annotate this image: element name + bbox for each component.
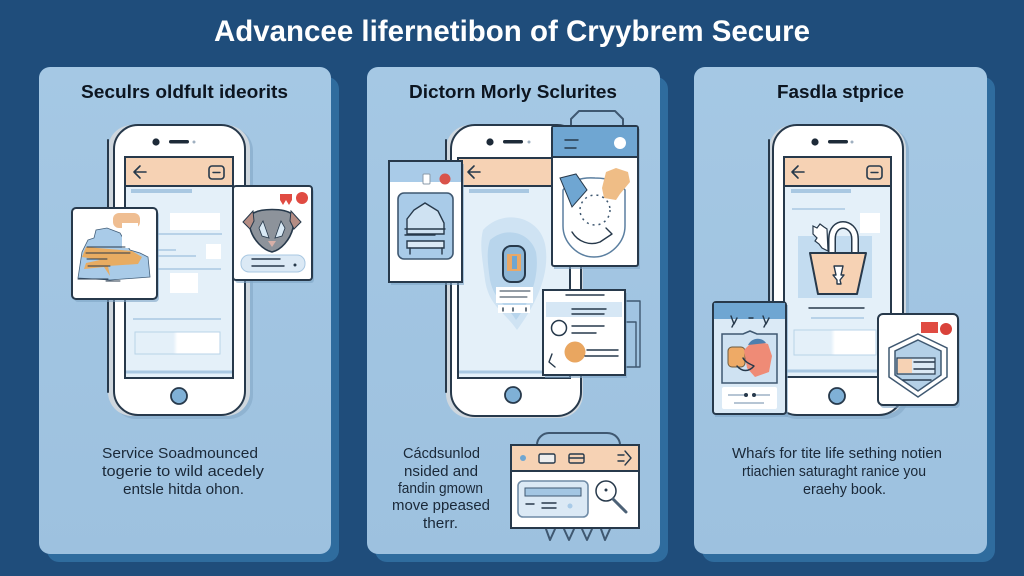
left card: vault illustration	[713, 302, 788, 417]
lower right card: list with badge	[543, 290, 640, 378]
phone 3	[769, 125, 909, 419]
left card: damaged document	[72, 208, 159, 302]
body text: panel 2: fandin gmown	[398, 480, 483, 497]
body text: panel 2	[392, 445, 490, 532]
body text: panel 1: togerie to wild acedely	[102, 463, 265, 480]
body text: panel 2: Cácdsunlod	[403, 445, 480, 462]
left card: database box	[389, 161, 464, 285]
body text: panel 2: move ppeased	[392, 497, 490, 514]
icon: padlock	[810, 224, 866, 294]
right card: hexagon badge	[878, 314, 960, 408]
right card: guard animal	[233, 186, 314, 283]
panel: fasdla stprice	[694, 67, 995, 562]
body text: panel 3: Whaŕs for tite life sething notien	[732, 445, 942, 462]
title: Advancee lifernetibon of Cryybrem Secure	[214, 15, 810, 48]
body text: panel 1: Service Soadmounced	[102, 445, 258, 462]
body text: panel 3	[732, 445, 942, 498]
top right card: shield seal with handle	[552, 111, 640, 269]
body text: panel 1	[102, 445, 265, 498]
heading: panel 3: Fasdla stprice	[777, 82, 904, 102]
heading: panel 1: Seculrs oldfult ideorits	[81, 82, 288, 102]
body text: panel 1: entsle hitda ohon.	[123, 481, 244, 498]
body text: panel 2: therr.	[423, 515, 458, 532]
heading: panel 2: Dictorn Morly Sclurites	[409, 82, 617, 102]
body text: panel 3: eraehy book.	[803, 481, 886, 498]
body text: panel 3: rtiachien saturaght ranice you	[742, 463, 926, 480]
panel: dictorn	[367, 67, 668, 562]
phone 1	[108, 125, 253, 419]
phone 2	[446, 125, 583, 418]
browser card with search	[511, 433, 639, 540]
panel: secure identity	[39, 67, 339, 562]
body text: panel 2: nsided and	[404, 463, 478, 480]
